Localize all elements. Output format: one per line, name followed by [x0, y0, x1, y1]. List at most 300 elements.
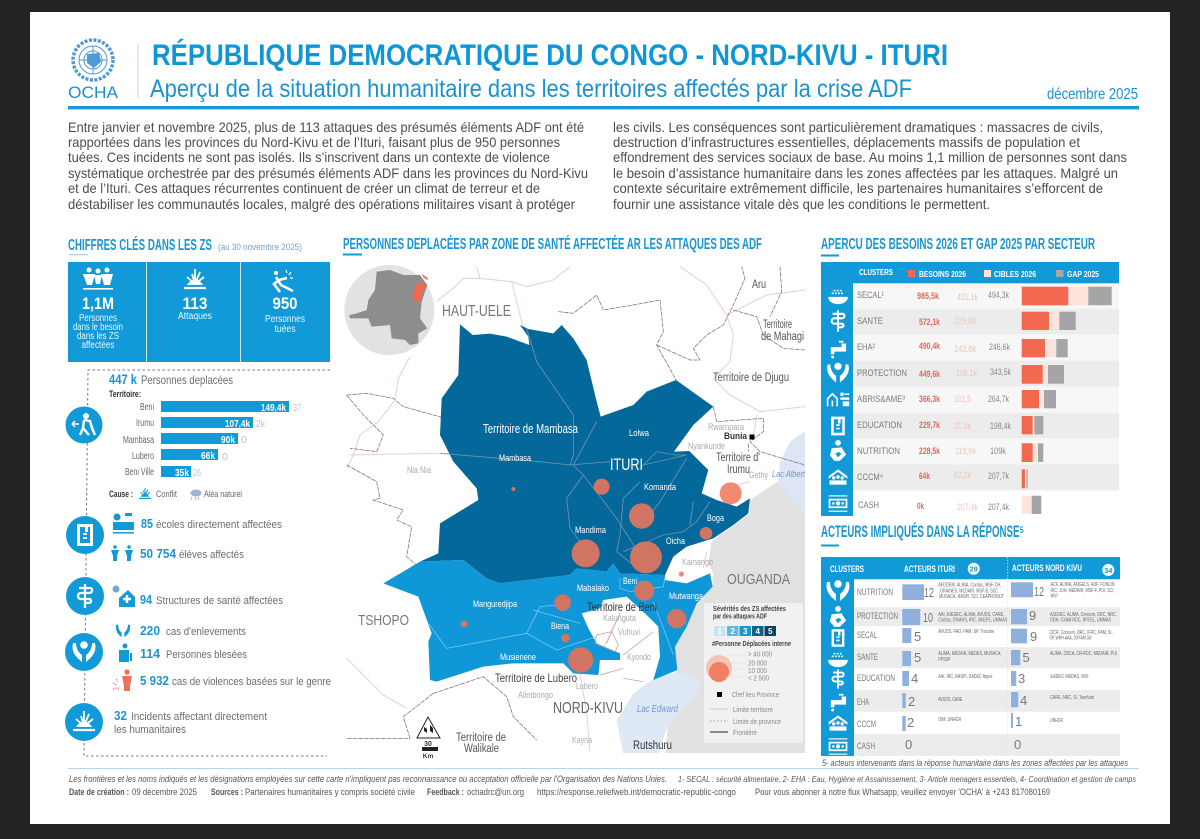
gap values: 207,7k — [988, 471, 1009, 482]
bar chart: displaced by territory: Beni Ville — [125, 467, 154, 478]
bars: actors nord kivu — [1011, 582, 1033, 728]
legend: symbols: Limite de province — [733, 717, 781, 726]
actor names: nord kivu: UNHCR — [1050, 718, 1063, 724]
sector labels: PROTECTION — [857, 368, 907, 379]
icon: falling person — [274, 270, 293, 292]
counts: actors nord kivu: 4 — [1020, 693, 1027, 708]
map labels: health zones: Manguredjipa — [473, 599, 518, 610]
block: education: écoles directement affectées — [156, 519, 282, 531]
block: education: élèves affectés — [179, 549, 244, 561]
intro text right — [613, 119, 1127, 212]
footnote: actors: 5- acteurs intervenants dans la réponse humanitaire dans les zones affectées par les attaques — [822, 758, 1128, 768]
bar chart: displaced by territory: 149,4k — [261, 402, 286, 414]
logo divider — [138, 45, 139, 98]
block: displaced persons — [109, 371, 301, 500]
icon: education circle — [66, 516, 104, 554]
heading: map: PERSONNES DEPLACÉES PAR ZONE DE SANTÉ AFFECTÉE AR LES ATTAQUES DES ADF — [343, 234, 762, 253]
bar chart: displaced by territory: 66k — [201, 450, 215, 462]
table header: 29 — [970, 564, 978, 574]
logo wordmark: OCHA — [68, 83, 119, 102]
cluster labels: CASH — [857, 741, 875, 752]
stat: people in need: affectées — [82, 340, 114, 351]
map labels: health zones: Oicha — [666, 536, 686, 547]
actor names: nord kivu: CARE, NRC, SI, Tearfund — [1050, 695, 1094, 701]
cluster labels: NUTRITION — [857, 587, 893, 598]
icon: humanitarian incidents circle — [65, 703, 103, 741]
credits: Date de création : — [69, 787, 129, 798]
intro text right: le besoin d’assistance humanitaire dans les zones affectées par les attaques. Malgré un — [613, 165, 1118, 181]
map labels: territories: Territoire de Beni — [587, 600, 657, 614]
map labels: health zones: Mabalako — [577, 583, 609, 594]
map: lake albert — [778, 430, 807, 513]
legend: severity scale: 4 — [755, 627, 760, 636]
bar chart: displaced by territory: Mambasa — [123, 435, 154, 446]
icon: pupils — [111, 545, 133, 561]
cluster labels: EDUCATION — [857, 673, 895, 684]
actor names: ituri: PPSSP — [938, 657, 951, 663]
sector labels: EHA² — [857, 342, 875, 353]
credits — [69, 787, 1050, 798]
map legend: Sévérités des ZS affectées — [713, 606, 786, 613]
row backgrounds — [854, 607, 1120, 756]
credits: Feedback : — [427, 787, 464, 798]
title: RÉPUBLIQUE DEMOCRATIQUE DU CONGO - NORD-KIVU - ITURI — [152, 38, 948, 72]
table header: 34 — [1104, 566, 1113, 575]
block: humanitarian incidents: les humanitaires — [114, 724, 186, 736]
block: protection: 220 — [140, 623, 160, 638]
block: education — [111, 513, 282, 561]
map labels: health zones: Beni — [623, 576, 637, 587]
subtitle: Aperçu de la situation humanitaire dans les territoires affectés par la crise ADF — [150, 75, 912, 103]
legend: bubble sizes: 20 000 — [748, 658, 767, 668]
block: humanitarian incidents: 32 — [114, 708, 127, 723]
credits: Partenaires humanitaires y compris société civile — [245, 787, 415, 798]
map labels: territories: Rutshuru — [633, 740, 672, 752]
map labels: territories: de Mahagi — [761, 331, 804, 343]
block: health: 94 — [140, 592, 153, 607]
block: protection: cas d'enlevements — [166, 626, 246, 638]
stat: attacks — [178, 294, 212, 322]
map: administrative limits — [346, 267, 805, 740]
actor names: ituri: ALIMA, MEDAIR, MEDES, MUSACA, — [938, 651, 1001, 657]
stat: people in need: dans le besoin — [73, 322, 123, 333]
bar chart: displaced by territory: 35k — [175, 467, 189, 479]
map labels: provinces and countries: OUGANDA — [727, 571, 790, 588]
icon: health structure — [112, 586, 135, 607]
map labels: health zones: Kamango — [682, 557, 713, 567]
north arrow and scale: Km — [423, 753, 433, 760]
map labels: territories: Territoire de Djugu — [713, 372, 789, 384]
legend: symbols — [710, 690, 781, 737]
target values: 229,8k — [954, 316, 976, 327]
block: education: 85 — [141, 516, 153, 531]
bar chart: displaced by territory: 0 — [241, 434, 247, 446]
bar chart: displaced by territory: Irumu — [136, 418, 154, 429]
north arrow and scale: 30 — [424, 741, 432, 748]
actor names: ituri: OIM, UNHCR — [938, 717, 961, 723]
sector labels: CASH — [858, 500, 879, 511]
map labels: health zones: Nyankunde — [688, 441, 725, 451]
needs values: 572,1k — [919, 317, 941, 328]
north arrow and scale — [417, 717, 440, 760]
counts: actors ituri: 10 — [923, 610, 933, 625]
legend: cause: Cause : — [109, 489, 133, 500]
block: protection: cas de violences basées sur le genre — [172, 676, 331, 688]
actor names: ituri: AVUDS, FAO, PAM, SP, Trocaire — [938, 629, 994, 635]
block: humanitarian incidents — [114, 708, 267, 736]
icon: injured person — [119, 644, 132, 662]
target values: 431,1k — [957, 292, 978, 303]
block: humanitarian incidents: Incidents affectant directement — [131, 711, 267, 723]
map labels: territories: Territoire d' — [716, 452, 760, 464]
map labels: health zones: Alimbongo — [518, 690, 553, 700]
map: pink roads — [347, 267, 805, 752]
icon: displaced circle — [66, 406, 102, 444]
icon: raised arms — [116, 625, 130, 637]
intro text right: destruction d’infrastructures essentielles, déplacements massifs de population et — [613, 134, 1080, 150]
table header — [821, 557, 1120, 756]
sector labels: CCCM⁴ — [857, 472, 883, 483]
counts: actors nord kivu: 3 — [1018, 671, 1025, 686]
block: health — [112, 586, 283, 607]
intro text right: effondrement des services sociaux de base. Au moins 1,1 million de personnes sont dans — [613, 149, 1127, 165]
map legend — [704, 603, 803, 743]
table header: CIBLES 2026 — [994, 269, 1036, 279]
legend: cause — [109, 488, 242, 500]
gap values: 198,4k — [990, 421, 1011, 432]
block: displaced persons: Personnes deplacées — [141, 373, 233, 387]
map labels: health zones: Gethy — [749, 470, 768, 480]
stat: killed — [265, 294, 305, 335]
stat: people in need: 1,1M — [82, 294, 114, 313]
map: lake edward — [617, 672, 702, 755]
counts: actors nord kivu: 12 — [1034, 584, 1044, 599]
needs values: 229,7k — [919, 420, 941, 431]
map labels: health zones: Mutwanga — [669, 591, 704, 602]
counts: actors ituri: 5 — [914, 650, 921, 665]
legend: severity scale: 1 — [717, 627, 722, 636]
sector labels: ABRIS&AME³ — [857, 394, 905, 405]
table header: ACTEURS NORD KIVU — [1012, 563, 1082, 573]
sector labels: SECAL¹ — [857, 290, 884, 301]
icon: school — [113, 513, 134, 534]
target values: 119,6k — [955, 446, 976, 457]
counts: actors ituri — [905, 585, 934, 752]
counts: actors nord kivu: 1 — [1015, 714, 1022, 729]
map labels: health zones: Lac Edward — [637, 704, 678, 715]
legend: bubble sizes — [706, 650, 772, 682]
legend: severity scale: 5 — [768, 627, 773, 636]
cluster labels: PROTECTION — [857, 611, 898, 622]
bars: actors ituri — [902, 584, 924, 731]
disclaimer: Les frontières et les noms indiqués et les désignations employées sur cette carte n'impliquent pas reconnaissance ou acceptation officielle par l'Organisation des Nations Unies. — [69, 774, 667, 785]
block: health: Structures de santé affectées — [156, 595, 283, 607]
map labels: health zones: Nia Nia — [407, 465, 431, 475]
block: displaced persons: Territoire: — [109, 389, 141, 400]
bar chart: displaced by territory: Beni — [140, 402, 154, 413]
sector labels: NUTRITION — [857, 446, 900, 457]
map labels: health zones: Musienene — [500, 652, 536, 663]
date: décembre 2025 — [1047, 86, 1138, 103]
counts: actors ituri: 4 — [911, 671, 918, 686]
stat: killed: 950 — [272, 294, 298, 313]
panel: key figures — [68, 262, 330, 362]
target values: 101,5 — [954, 394, 971, 405]
intro text left: et de l’Ituri. Ces attaques récurrentes continuent de créer un climat de terreur et de — [68, 180, 540, 196]
row backgrounds — [853, 283, 1119, 490]
cluster labels: SANTE — [857, 652, 878, 663]
counts: actors ituri: 2 — [907, 715, 914, 730]
table header: CLUSTERS — [830, 564, 864, 574]
map legend: par des attaques ADF — [713, 614, 768, 620]
actor names: ituri — [938, 582, 1008, 723]
icon: health circle — [66, 577, 104, 615]
counts: actors nord kivu: 9 — [1029, 608, 1036, 623]
map labels: health zones: Kyondo — [627, 652, 651, 662]
legend: bubble sizes: 10 000 — [748, 666, 767, 675]
intro text left — [68, 119, 588, 212]
map labels: health zones: Vuhuvi — [618, 627, 640, 637]
block: displaced persons: 447 k — [109, 371, 137, 387]
legend: symbols: Chef lieu Province — [732, 690, 779, 699]
needs values — [917, 291, 941, 512]
map labels: territories: Territoire de Lubero — [495, 671, 577, 685]
icon: people — [83, 268, 113, 290]
map labels: territories: Territoire — [763, 319, 792, 331]
panel: needs table — [821, 262, 1119, 516]
block: protection — [113, 623, 331, 691]
actor names: nord kivu: EADEV, MEDAS, WVI — [1050, 674, 1088, 680]
map labels: territories: Aru — [752, 279, 766, 291]
icon: protection circle — [65, 633, 103, 671]
actor names: nord kivu: SP, WHH-AAA, OXFAM GB — [1050, 636, 1092, 642]
counts: actors ituri: 0 — [905, 737, 912, 752]
needs values: 449,6k — [919, 369, 941, 380]
map labels: health zones: Rwampara — [708, 422, 744, 432]
counts: actors ituri: 2 — [908, 694, 915, 709]
sector labels — [857, 290, 907, 511]
map labels: health zones: Mandima — [575, 525, 607, 536]
credits: Sources : — [211, 787, 243, 798]
gap values: 494,3k — [988, 290, 1009, 301]
actor names: nord kivu: CICR, Concern, DRC, IFRC, PAM, SI, — [1050, 630, 1112, 636]
header rule — [68, 106, 1139, 109]
needs values: 366,3k — [919, 394, 941, 405]
map labels: health zones: Lubero — [576, 681, 598, 691]
map labels: provinces and countries: TSHOPO — [358, 612, 409, 629]
intro text left: rapportées dans les provinces du Nord-Kivu et de l’Ituri, faisant plus de 950 personnes — [68, 134, 560, 150]
gap values: 246,6k — [989, 342, 1010, 353]
stat: killed: Personnes — [265, 314, 305, 325]
map labels: health zones: Kalunguta — [603, 613, 636, 623]
map labels: health zones — [407, 422, 805, 745]
target values: 243,8k — [954, 344, 976, 355]
counts: actors nord kivu — [1014, 584, 1044, 752]
map labels: provinces and countries: ITURI — [610, 455, 643, 474]
counts: actors nord kivu: 5 — [1022, 650, 1030, 665]
actor names: ituri: AVUDS, CARE — [938, 697, 963, 703]
legend: symbols: Limite territoire — [733, 705, 773, 714]
map: zones severity 5 — [420, 324, 750, 583]
icon: GBV figure — [113, 669, 132, 691]
counts: actors ituri: 12 — [924, 585, 934, 600]
heading: actors: ACTEURS IMPLIQUÉS DANS LA RÉPONSE⁵ — [821, 522, 1024, 541]
stat: killed: tuées — [274, 324, 296, 335]
credits: https://response.reliefweb.int/democratic-republic-congo — [537, 787, 736, 798]
intro text left: systématique orchestrée par des présumés éléments ADF dans les provinces du Nord-Kivu — [68, 165, 588, 181]
cluster labels: CCCM — [857, 719, 876, 730]
intro text right: les civils. Les conséquences sont particulièrement dramatiques : massacres de civils, — [613, 119, 1103, 135]
bottom rule — [68, 768, 1139, 769]
stat: people in need — [73, 294, 123, 351]
heading: chiffres cles: CHIFFRES CLÉS DANS LES ZS — [68, 235, 212, 254]
actor names: nord kivu: ODH, OXAM RDC, RFEGL, UMMAS — [1050, 618, 1111, 624]
table header — [821, 262, 1119, 516]
actor names: ituri: Caritas, DIVAHS, IRC, SKEFS, UMMAS — [938, 618, 1008, 624]
map labels: health zones: Biena — [551, 621, 570, 632]
bar chart: displaced by territory: 2k — [256, 418, 266, 430]
actor names: ituri: MUSACA, RASPI, SCI, CEAPRONUT — [939, 594, 1005, 600]
intro text left: tuées. Ces incidents ne sont pas isolés. Ils s’inscrivent dans un contexte de violence — [68, 149, 550, 165]
actor names: nord kivu — [1050, 582, 1117, 724]
map: white territory of beni — [595, 613, 653, 682]
credits: ochadrc@un.org — [467, 787, 524, 798]
map labels: health zones: Lac Albert — [772, 469, 805, 479]
map labels: territories: Territoire de Mambasa — [483, 422, 578, 436]
counts: actors nord kivu: 9 — [1030, 629, 1037, 644]
actor names: ituri: AAI, AJEDEC, ALIMA, AVUDS, CARE, — [938, 612, 1004, 618]
bar chart: needs targets gap — [1022, 287, 1112, 514]
gap values: 207,4k — [988, 502, 1009, 513]
sector labels: EDUCATION — [857, 420, 902, 431]
bar chart: displaced by territory: 26 — [193, 467, 201, 479]
actor names: nord kivu: ALIMA, CBCA, CR-RDC, MEDAIR, PUI — [1050, 651, 1117, 657]
legend: bubble sizes: < 2 500 — [748, 674, 769, 682]
dashed frame — [84, 370, 330, 756]
target values: 106,1k — [956, 368, 977, 379]
actor names: ituri: AFDDEM, ALIMA, Caritas, MSF-CH, — [938, 582, 1001, 588]
map labels: territories: Irumu — [727, 464, 750, 476]
heading: chiffres cles: (au 30 novembre 2025) — [218, 242, 302, 253]
block: protection: 5 932 — [140, 673, 169, 688]
map labels: health zones: Komanda — [644, 482, 677, 493]
gap values: 343,5k — [990, 367, 1011, 378]
block: protection: 114 — [140, 646, 161, 661]
inset map: DRC location — [344, 265, 434, 355]
target values: 207,4k — [957, 502, 978, 513]
map labels: provinces and countries: NORD-KIVU — [553, 700, 623, 717]
block: protection: Personnes blesées — [166, 649, 247, 661]
bar chart: displaced by territory: 107,4k — [225, 418, 250, 430]
gap values: 109k — [990, 446, 1006, 457]
map: roads in zones — [440, 328, 710, 565]
target values — [953, 292, 978, 513]
intro text left: Entre janvier et novembre 2025, plus de 113 attaques des présumés éléments ADF ont été — [68, 119, 584, 135]
map legend: #Personne Déplacées interne — [712, 641, 791, 648]
table header: ACTEURS ITURI — [904, 564, 955, 574]
legend: cause: Conflit — [156, 489, 177, 500]
needs values: 64k — [919, 471, 930, 482]
bar chart: displaced by territory — [123, 401, 301, 479]
stat: people in need: dans les ZS — [77, 331, 119, 342]
map labels: territories: Territoire de — [456, 732, 506, 744]
needs values: 228,5k — [919, 446, 941, 457]
icon: attacks — [184, 269, 206, 288]
actor names: ituri: .GRAINES, MEDAIR, MSF-B, SEC — [939, 588, 998, 594]
stat: attacks: Attaques — [178, 311, 212, 322]
intro text left: déstabiliser les communautés locales, malgré des opérations militaires visant à protéger — [68, 196, 575, 212]
counts: actors nord kivu: 0 — [1014, 737, 1021, 752]
needs values: 985,5k — [917, 291, 940, 302]
gap values — [988, 290, 1011, 513]
panel: actors table — [821, 557, 1120, 756]
target values: 43,2k — [953, 470, 971, 481]
intro text right: fournir une assistance vitale dès que les conditions le permettent. — [613, 196, 990, 212]
stat: attacks: 113 — [182, 294, 208, 313]
map: zones severity 3 — [383, 560, 713, 682]
legend: severity scale: 3 — [743, 627, 748, 636]
needs values: 490,4k — [919, 341, 941, 352]
needs values: 0k — [917, 501, 924, 512]
cluster icons — [827, 580, 849, 755]
bar chart: displaced by territory: 37 — [293, 402, 301, 414]
map — [344, 265, 807, 760]
footer — [69, 774, 1137, 798]
map labels: health zones: Bunia — [724, 431, 748, 442]
actor names: nord kivu: AJEDEC, ALIMA, Concern, DRC, NRC, — [1050, 612, 1117, 618]
legend: severity scale — [714, 626, 776, 636]
cluster labels: SECAL — [857, 630, 877, 641]
target values: 31,3k — [954, 421, 971, 432]
block: education: 50 754 — [140, 546, 177, 561]
credits: Pour vous abonner à notre flux Whatsapp, veuillez envoyer 'OCHA' à +243 817080169 — [755, 787, 1050, 798]
counts: actors ituri: 5 — [914, 629, 921, 644]
map labels: provinces and countries — [358, 303, 790, 717]
actor names: nord kivu: ACF, ALIMA, ANGELS, ADF, FONLIN — [1050, 582, 1115, 588]
map labels: health zones: Boga — [707, 513, 725, 524]
map labels: health zones: Mambasa — [499, 453, 532, 464]
cluster labels: EHA — [857, 697, 869, 708]
cluster labels — [857, 587, 898, 752]
table header: BESOINS 2026 — [919, 269, 966, 279]
map: uganda — [665, 465, 807, 755]
icon: UN emblem — [73, 40, 113, 80]
header — [68, 38, 1139, 109]
map labels: health zones: Lolwa — [629, 428, 650, 439]
map: displaced bubbles — [461, 479, 742, 673]
actor names: ituri: AAI, IRC, RASPI, SADEC Appui — [938, 674, 992, 680]
legend: symbols: Frontière — [733, 728, 757, 737]
map labels: health zones: Kayna — [572, 735, 592, 745]
map labels: territories — [456, 279, 804, 755]
stat: people in need: Personnes — [79, 313, 117, 324]
map labels: provinces and countries: HAUT-UELE — [442, 303, 511, 320]
sector labels: SANTE — [857, 316, 883, 327]
legend: bubble sizes: > 40 000 — [748, 650, 772, 658]
table header: GAP 2025 — [1067, 269, 1099, 279]
gap values: 264,7k — [988, 394, 1009, 405]
map labels: territories: Walikale — [464, 743, 499, 755]
bar chart: displaced by territory: 0 — [222, 451, 228, 463]
credits: 09 décembre 2025 — [132, 787, 197, 798]
bar chart: displaced by territory: Lubero — [132, 451, 154, 462]
legend: severity scale: 2 — [730, 627, 735, 636]
intro text right: contexte sécuritaire extrêmement difficile, les partenaires humanitaires s’efforcent de — [613, 180, 1103, 196]
actor names: nord kivu: WVI — [1050, 594, 1058, 600]
table header: CLUSTERS — [859, 267, 893, 277]
bar chart: displaced by territory: 90k — [221, 434, 235, 446]
legend: cause: Aléa naturel — [204, 489, 242, 500]
